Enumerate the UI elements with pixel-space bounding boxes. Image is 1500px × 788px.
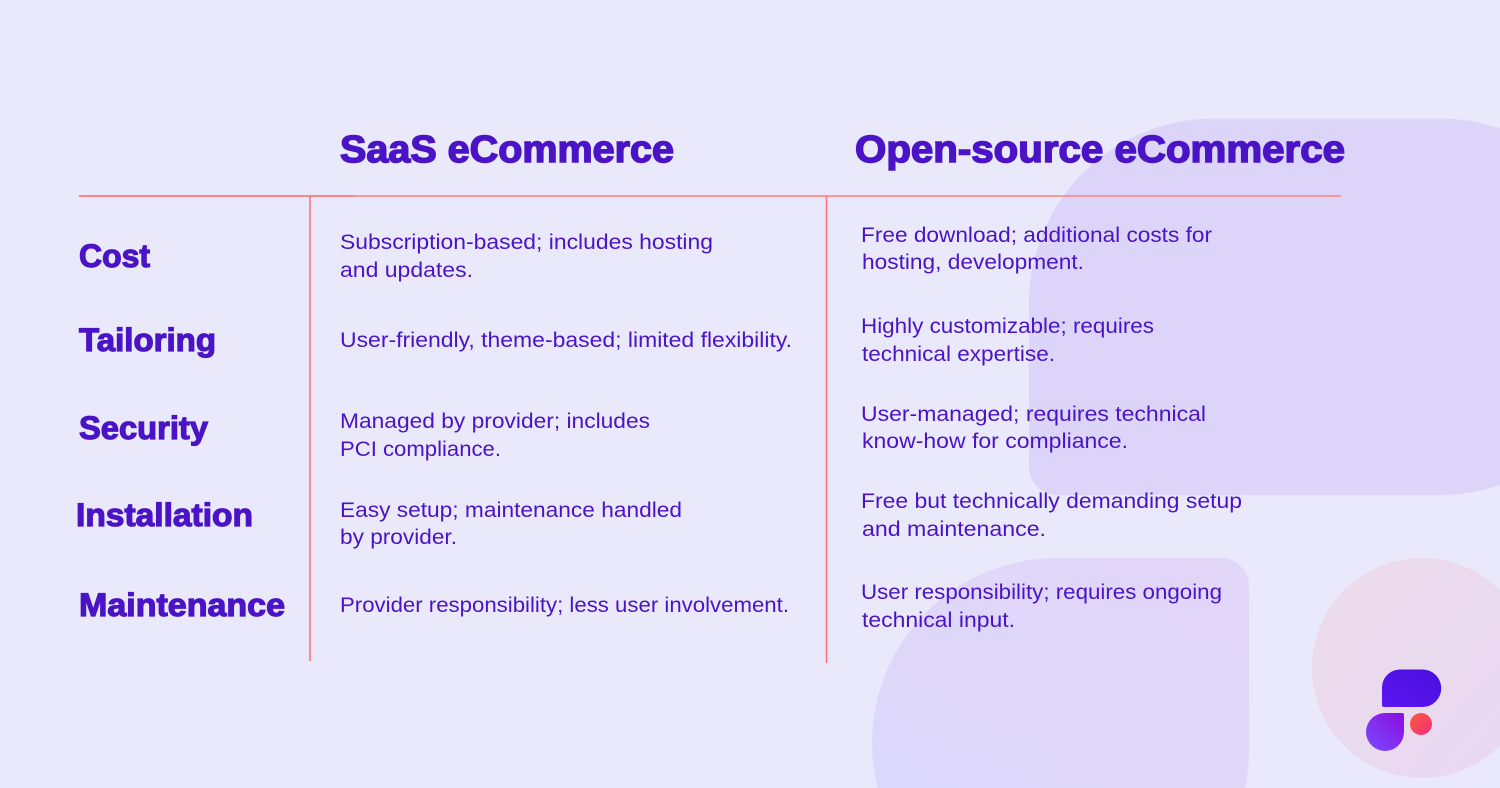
column heading: Open-source eCommerce: Open-source eCommerce bbox=[855, 129, 1345, 171]
icon: brand logo bbox=[1366, 670, 1441, 751]
decorative shape: rounded panel bottom bbox=[872, 558, 1249, 788]
row labels bbox=[76, 238, 285, 623]
Open-source: maintenance: technical input. bbox=[862, 608, 1015, 632]
SaaS: tailoring: User-friendly, theme-based; limited flexibility. bbox=[340, 328, 792, 352]
Open-source: maintenance: User responsibility; requires ongoing bbox=[861, 580, 1222, 604]
SaaS: security: Managed by provider; includes bbox=[340, 409, 650, 433]
Open-source: cost bbox=[861, 223, 1212, 274]
decorative shape: large rounded panel top right bbox=[1029, 118, 1500, 495]
SaaS: installation bbox=[340, 498, 682, 549]
SaaS: installation: by provider. bbox=[340, 525, 457, 549]
table grid lines bbox=[79, 196, 1341, 663]
SaaS: security: PCI compliance. bbox=[340, 437, 501, 461]
row label: Tailoring: Tailoring bbox=[79, 322, 216, 358]
Open-source column text bbox=[861, 223, 1242, 632]
SaaS: cost: Subscription-based; includes hosting bbox=[340, 230, 713, 254]
Open-source: security: know-how for compliance. bbox=[862, 429, 1128, 453]
Open-source: tailoring: Highly customizable; requires bbox=[861, 314, 1154, 338]
decorative shape: pink circle bbox=[1312, 558, 1500, 778]
Open-source: tailoring bbox=[861, 314, 1154, 366]
Open-source: installation: and maintenance. bbox=[862, 517, 1046, 541]
SaaS: security bbox=[340, 409, 650, 461]
row label: Security: Security bbox=[79, 410, 208, 446]
Open-source: cost: Free download; additional costs for bbox=[861, 223, 1212, 247]
row label: Maintenance: Maintenance bbox=[79, 587, 285, 623]
Open-source: security: User-managed; requires technical bbox=[861, 402, 1206, 426]
SaaS: cost: and updates. bbox=[340, 258, 473, 282]
Open-source: tailoring: technical expertise. bbox=[862, 342, 1055, 366]
Open-source: cost: hosting, development. bbox=[862, 250, 1084, 274]
SaaS: installation: Easy setup; maintenance handled bbox=[340, 498, 682, 522]
row label: Installation: Installation bbox=[76, 497, 253, 533]
Open-source: maintenance bbox=[861, 580, 1222, 632]
column heading: SaaS eCommerce: SaaS eCommerce bbox=[340, 129, 674, 171]
SaaS: maintenance: Provider responsibility; less user involvement. bbox=[340, 593, 789, 617]
Open-source: installation: Free but technically demanding setup bbox=[861, 489, 1242, 513]
row label: Cost: Cost bbox=[79, 238, 150, 274]
SaaS: cost bbox=[340, 230, 713, 282]
Open-source: security bbox=[861, 402, 1206, 453]
SaaS column text bbox=[340, 230, 792, 617]
Open-source: installation bbox=[861, 489, 1242, 541]
